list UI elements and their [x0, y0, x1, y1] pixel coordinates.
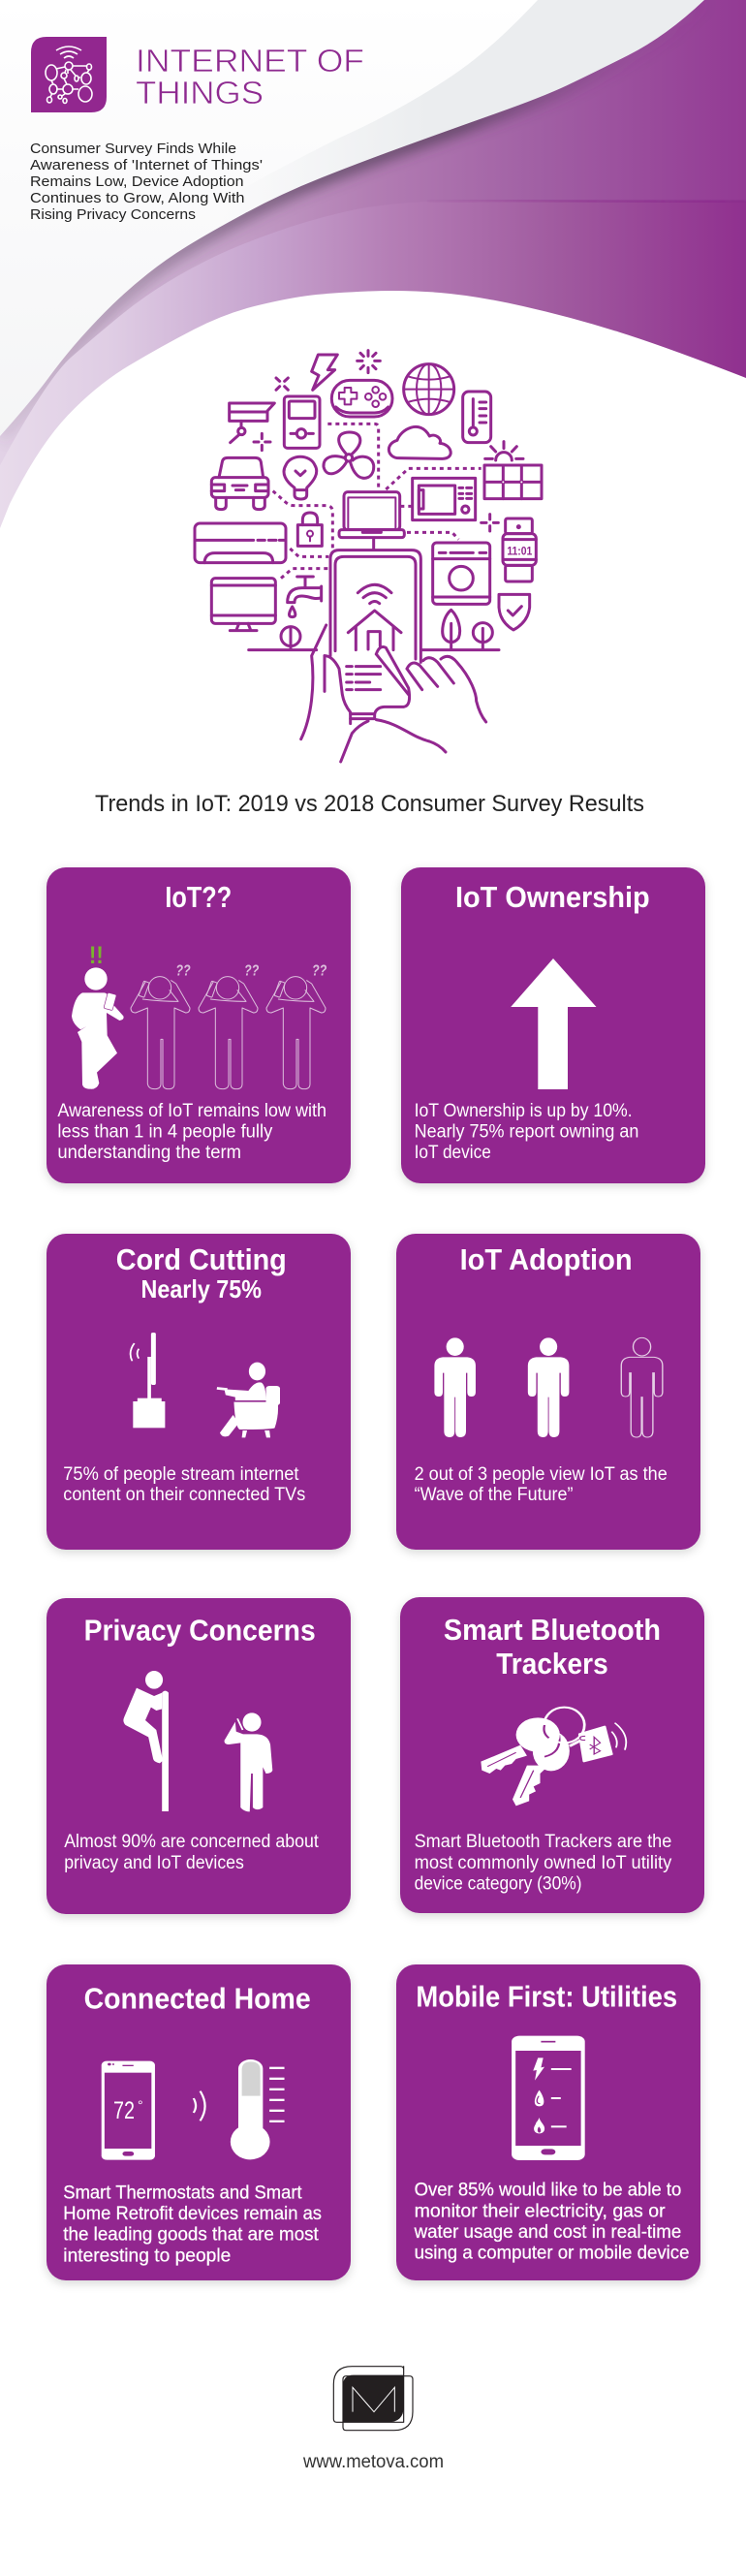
panel: Cord Cutting: Cord Cutting — [116, 1242, 287, 1276]
text: connected home: Home Retrofit devices remain as — [63, 2204, 322, 2224]
text: ownership — [415, 1101, 638, 1163]
text: phone temperature reading: ° — [138, 2097, 143, 2113]
section heading: Trends in IoT: 2019 vs 2018 Consumer Survey Results — [95, 791, 644, 817]
panel: Mobile First: Utilities: Mobile First: Utilities — [416, 1980, 677, 2014]
subtitle: Rising Privacy Concerns — [30, 206, 196, 223]
text: connected home: Smart Thermostats and Smart — [63, 2183, 302, 2203]
subtitle: Remains Low, Device Adoption — [30, 173, 244, 190]
text: mobile first: water usage and cost in real-time — [414, 2222, 681, 2243]
text: connected home: the leading goods that are most — [63, 2225, 320, 2246]
text: bluetooth trackers: device category (30%) — [415, 1873, 581, 1894]
text: connected home: interesting to people — [63, 2246, 231, 2266]
text: awareness: less than 1 in 4 people fully — [57, 1122, 273, 1142]
subtitle: Awareness of 'Internet of Things' — [30, 157, 263, 173]
icon: one aware person and three confused people: ?? — [175, 963, 191, 980]
text: adoption: 2 out of 3 people view IoT as the — [415, 1464, 668, 1485]
text: mobile first — [414, 2181, 690, 2264]
panel: IoT??: IoT?? — [165, 880, 232, 914]
panel: Smart Bluetooth Trackers — [400, 1597, 704, 1913]
title: THINGS — [136, 76, 264, 111]
hero illustration: connected devices around a smartphone — [195, 351, 542, 762]
subtitle: Continues to Grow, Along With — [30, 190, 244, 206]
text: mobile first: using a computer or mobile device — [415, 2244, 690, 2264]
text: privacy: Almost 90% are concerned about — [64, 1832, 319, 1852]
panel: Privacy Concerns: Privacy Concerns — [84, 1614, 316, 1648]
text: bluetooth trackers: Smart Bluetooth Trackers are the — [415, 1832, 671, 1852]
title — [136, 44, 364, 111]
text: awareness: understanding the term — [57, 1143, 241, 1163]
icon: one aware person and three confused people: ?? — [244, 963, 260, 980]
panel: Cord Cutting — [47, 1234, 351, 1550]
icon: phone and thermometer — [102, 2059, 285, 2160]
icon: one aware person and three confused people: !! — [89, 942, 104, 969]
text: ownership: Nearly 75% report owning an — [415, 1122, 638, 1142]
hero illustration: connected devices around a smartphone: 11:01 — [507, 544, 533, 557]
text: bluetooth trackers — [415, 1832, 672, 1894]
icon: one aware person and three confused people: ?? — [312, 963, 327, 980]
panel: Mobile First: Utilities — [396, 1964, 700, 2280]
panel: IoT?? — [47, 867, 351, 1183]
website URL: www.metova.com — [302, 2452, 444, 2472]
panel: Connected Home: Connected Home — [84, 1982, 311, 2016]
panel: IoT Ownership: IoT Ownership — [455, 880, 650, 914]
text: cord cutting — [63, 1464, 305, 1505]
icon: one aware person and three confused people — [72, 942, 327, 1089]
text: cord cutting: 75% of people stream internet — [63, 1464, 299, 1485]
text: awareness: Awareness of IoT remains low with — [57, 1101, 326, 1121]
panel: Smart Bluetooth Trackers: Smart Bluetooth — [444, 1613, 661, 1647]
text: ownership: IoT device — [415, 1143, 491, 1163]
icon: phone with utility meters — [512, 2036, 585, 2160]
text: mobile first: Over 85% would like to be able to — [415, 2181, 681, 2201]
text: awareness — [57, 1101, 326, 1163]
text: ownership: IoT Ownership is up by 10%. — [415, 1101, 633, 1121]
panel: IoT Adoption: IoT Adoption — [460, 1242, 633, 1276]
panel: IoT Adoption — [396, 1234, 700, 1550]
text: connected home — [63, 2183, 322, 2266]
text: bluetooth trackers: most commonly owned IoT utility — [415, 1853, 672, 1873]
text: privacy: privacy and IoT devices — [64, 1853, 244, 1873]
icon: Metova logo — [333, 2367, 413, 2431]
text: cord cutting: content on their connected TVs — [63, 1485, 305, 1505]
icon: three people, two filled — [434, 1337, 663, 1437]
panel: IoT Ownership — [401, 867, 705, 1183]
icon: keys with bluetooth tag — [481, 1708, 626, 1806]
subtitle: Consumer Survey Finds While — [30, 141, 236, 157]
header swoosh background — [0, 0, 746, 548]
text: adoption — [415, 1464, 668, 1505]
icon: up arrow — [511, 958, 597, 1089]
text: adoption: “Wave of the Future” — [415, 1485, 574, 1505]
icon: IoT network logo — [31, 37, 107, 112]
panel: Privacy Concerns — [47, 1598, 351, 1914]
subtitle — [30, 141, 263, 223]
panel: Cord Cutting: Nearly 75% — [141, 1274, 262, 1304]
title: INTERNET OF — [136, 44, 364, 79]
icon: snooper on a pole and person on phone — [123, 1671, 272, 1811]
text: phone temperature reading: 72 — [113, 2097, 135, 2124]
panel: Smart Bluetooth Trackers: Trackers — [496, 1647, 608, 1681]
panel: Connected Home — [47, 1964, 351, 2280]
text: mobile first: monitor their electricity, gas or — [415, 2201, 666, 2221]
text: privacy — [64, 1832, 319, 1873]
icon: TV and viewer — [131, 1333, 280, 1437]
